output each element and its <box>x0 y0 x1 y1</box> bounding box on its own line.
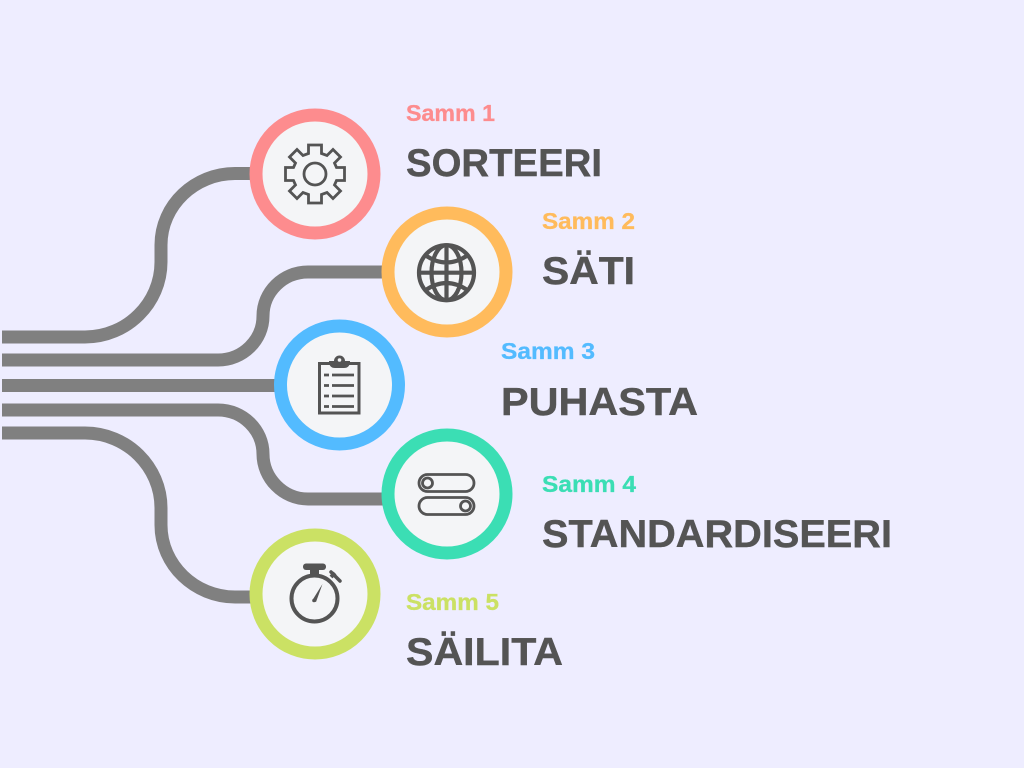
connector: step 4 <box>2 410 390 499</box>
step 2 label: Samm 2 <box>542 208 635 234</box>
icon: toggles <box>419 474 474 514</box>
step 5 label <box>406 589 563 674</box>
connector: step 3 <box>2 379 285 392</box>
step 4 title: STANDARDISEERI <box>542 513 892 556</box>
step 1 circle <box>256 115 374 233</box>
step 5 label: Samm 5 <box>406 589 499 615</box>
step 3 label: Samm 3 <box>501 338 595 364</box>
step 1 label: Samm 1 <box>406 100 495 126</box>
step 3 circle <box>280 326 398 444</box>
step 2 label <box>542 208 635 293</box>
step 4 label <box>542 471 892 556</box>
step 5 circle <box>256 535 374 653</box>
icon: globe <box>419 245 474 300</box>
step 1 title: SORTEERI <box>406 142 602 185</box>
step 5 title: SÄILITA <box>406 631 563 674</box>
step 3 title: PUHASTA <box>501 381 698 424</box>
icon: stopwatch <box>292 564 340 622</box>
icon: clipboard <box>320 356 359 413</box>
connector: step 1 <box>2 174 255 337</box>
step 1 label <box>406 100 602 185</box>
connector: step 2 <box>2 272 390 360</box>
step 4 circle <box>388 435 506 553</box>
icon: gear <box>286 145 344 203</box>
step 3 label <box>501 338 698 424</box>
step 4 label: Samm 4 <box>542 471 636 497</box>
connector: step 5 <box>2 433 255 597</box>
step 2 circle <box>388 213 506 331</box>
connector lines <box>2 174 390 597</box>
step 2 title: SÄTI <box>542 250 635 293</box>
